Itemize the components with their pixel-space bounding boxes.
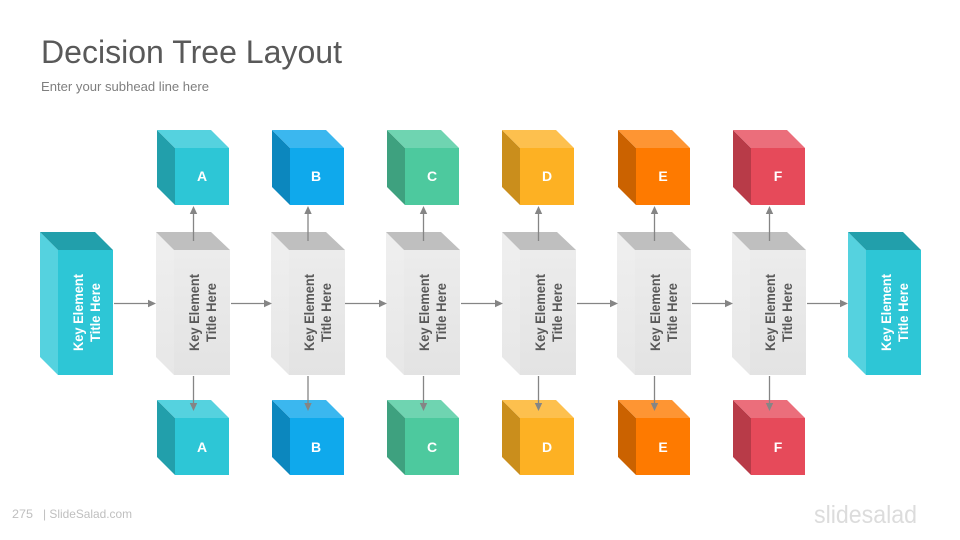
cube top B xyxy=(272,130,344,205)
arrow up A xyxy=(190,206,197,241)
arrow: start to block 1 xyxy=(114,300,156,307)
arrow down C xyxy=(420,376,427,411)
arrow up E xyxy=(651,206,658,241)
arrow down F xyxy=(766,376,773,411)
cube top A: A xyxy=(197,168,207,184)
process block 5: Key Element xyxy=(647,274,663,351)
cube top F: F xyxy=(774,168,783,184)
arrow up C xyxy=(420,206,427,241)
arrow down D xyxy=(535,376,542,411)
cube top F xyxy=(733,130,805,205)
cube bottom E: E xyxy=(658,439,668,455)
cube top C xyxy=(387,130,459,205)
process block 6 xyxy=(732,232,806,375)
subhead: Enter your subhead line here xyxy=(41,79,209,94)
cube bottom F xyxy=(733,400,805,475)
arrow up D xyxy=(535,206,542,241)
arrow: block 6 to end xyxy=(807,300,848,307)
process block 1: Title Here xyxy=(203,283,219,342)
arrow: block 5 to 6 xyxy=(692,300,733,307)
process block 1: Key Element xyxy=(186,274,202,351)
process block 3: Key Element xyxy=(416,274,432,351)
cube bottom C: C xyxy=(427,439,437,455)
arrow: block 1 to 2 xyxy=(231,300,272,307)
arrow: block 3 to 4 xyxy=(461,300,503,307)
arrow up F xyxy=(766,206,773,241)
process block 1 xyxy=(156,232,230,375)
cube top E xyxy=(618,130,690,205)
cube bottom B xyxy=(272,400,344,475)
cube bottom A xyxy=(157,400,229,475)
process block 2: Title Here xyxy=(318,283,334,342)
cube bottom A: A xyxy=(197,439,207,455)
arrow: block 2 to 3 xyxy=(345,300,387,307)
cube top A xyxy=(157,130,229,205)
process block 4 xyxy=(502,232,576,375)
cube top D: D xyxy=(542,168,552,184)
arrow up B xyxy=(304,206,312,241)
logo wordmark: slidesalad xyxy=(814,501,917,529)
title: Decision Tree Layout xyxy=(41,34,342,70)
cube top E: E xyxy=(658,168,668,184)
arrow down B xyxy=(304,376,312,411)
arrow down E xyxy=(651,376,658,411)
cube bottom B: B xyxy=(311,439,321,455)
process block 4: Title Here xyxy=(549,283,565,342)
process block 5: Title Here xyxy=(664,283,680,342)
cube top D xyxy=(502,130,574,205)
process block 3 xyxy=(386,232,460,375)
start block: Title Here xyxy=(87,283,103,342)
process block 3: Title Here xyxy=(433,283,449,342)
page number: 275 xyxy=(12,507,33,521)
start block: Key Element xyxy=(70,274,86,351)
process block 4: Key Element xyxy=(532,274,548,351)
end block: Title Here xyxy=(895,283,911,342)
cube bottom D xyxy=(502,400,574,475)
cube top C: C xyxy=(427,168,437,184)
cube bottom C xyxy=(387,400,459,475)
process block 2: Key Element xyxy=(301,274,317,351)
arrow down A xyxy=(190,376,197,411)
end block xyxy=(848,232,921,375)
cube bottom F: F xyxy=(774,439,783,455)
process block 2 xyxy=(271,232,345,375)
cube bottom D: D xyxy=(542,439,552,455)
process block 6: Key Element xyxy=(762,274,778,351)
cube bottom E xyxy=(618,400,690,475)
process block 5 xyxy=(617,232,691,375)
start block xyxy=(40,232,113,375)
process block 6: Title Here xyxy=(779,283,795,342)
arrow: block 4 to 5 xyxy=(577,300,618,307)
end block: Key Element xyxy=(878,274,894,351)
cube top B: B xyxy=(311,168,321,184)
footer source: | SlideSalad.com xyxy=(43,507,132,521)
